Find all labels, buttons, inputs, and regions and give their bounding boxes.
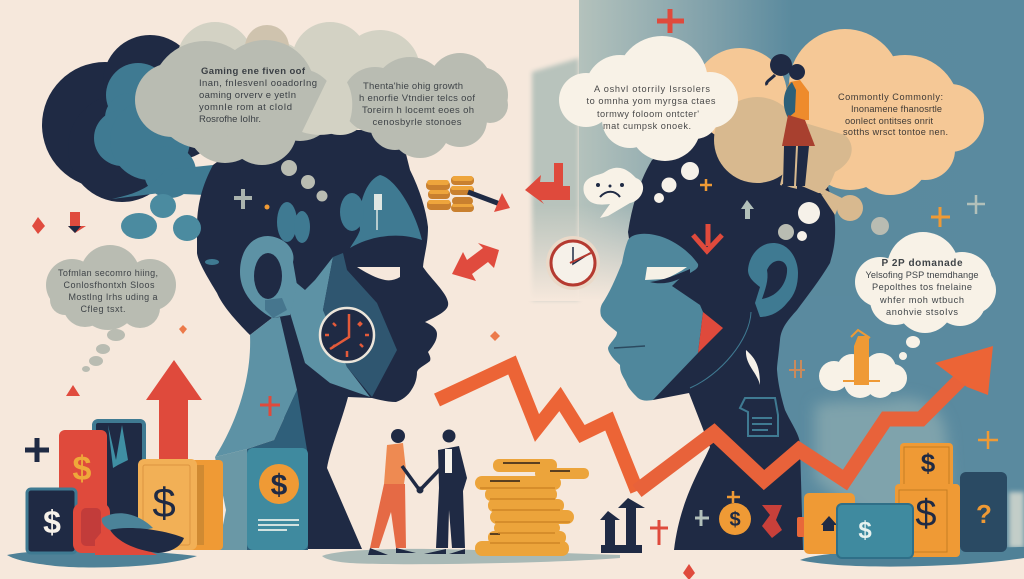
teal phone card <box>247 448 308 550</box>
white bubble text: A oshvl otorrily Isrsolers <box>594 84 710 94</box>
background: blue right panel <box>526 0 1024 550</box>
right money items group: $ <box>921 448 936 478</box>
icon: red rim clock <box>546 236 600 290</box>
P2P text: P 2P domanade <box>882 258 963 269</box>
community text: Inonamene fhanosrtle <box>851 104 942 114</box>
gaming bubble text: Inan, fnIesvenI ooadorIng <box>199 78 317 89</box>
white bubble text: to omnha yom myrgsa ctaes <box>586 96 716 106</box>
right money items group: ? <box>976 499 992 529</box>
neck plus <box>260 396 280 416</box>
right money items group: $ <box>858 517 872 544</box>
icon: rocket on cloud <box>789 330 907 398</box>
left money items group: $ <box>73 450 92 488</box>
P2P text: anohvie stsoIvs <box>886 307 958 317</box>
teal face <box>205 175 422 397</box>
growth bubble text: h enorfie Vtndier telcs oof <box>359 93 475 104</box>
panel: light cloud behind text bubbles <box>177 22 420 135</box>
neck teal <box>215 317 308 550</box>
teal dollar wallet <box>837 504 913 558</box>
tan overlap shape on head <box>714 97 863 221</box>
icon: plus <box>25 438 49 462</box>
white bubble text: tormwy foloom ontcter' <box>597 109 699 119</box>
decorative lower plus marks <box>650 195 998 579</box>
orange house box <box>797 493 855 554</box>
handshake figures <box>322 429 620 564</box>
icon: dollar coin and heart <box>719 503 782 538</box>
panel: white text bubble <box>559 36 738 161</box>
left head silhouette <box>42 35 448 550</box>
left money items group: $ <box>43 504 61 540</box>
P2P trail <box>899 336 920 360</box>
small bubble text: Tofmlan secomro hiing, <box>58 268 158 278</box>
gaming bubble text: yomnIe rom at cIoId <box>199 102 292 113</box>
right head silhouette <box>600 85 835 550</box>
panel: small left bubble <box>46 245 176 372</box>
right money items group <box>797 443 1024 567</box>
left money items group: $ <box>152 479 176 526</box>
icon: red left arrow <box>525 163 570 204</box>
community text: oonlect ontitses onrit <box>845 116 933 126</box>
head shape <box>197 130 448 549</box>
orange dollar box top <box>900 443 953 491</box>
icon: top red plus <box>657 9 684 33</box>
newspaper icon <box>740 398 778 436</box>
thought bubble dots under navy cloud <box>121 194 201 241</box>
panel: P2P text bubble <box>855 232 996 360</box>
head navy <box>628 85 835 550</box>
dark suit figure <box>416 430 467 554</box>
card red dollar <box>59 430 107 540</box>
teal face <box>600 234 703 401</box>
clock on cheek <box>320 308 374 362</box>
small bubble text: Cfleg tsxt. <box>80 304 126 314</box>
small bubble trail <box>82 329 125 372</box>
white bubble text <box>586 84 716 131</box>
icon: small black up arrows <box>600 498 645 553</box>
orange dollar box bottom <box>895 484 960 557</box>
icon: double arrow <box>452 243 499 281</box>
orange figure <box>368 429 418 555</box>
P2P text <box>866 258 978 317</box>
community text: sotths wrsct tontoe nen. <box>843 127 948 137</box>
icon: up arrow <box>146 360 202 470</box>
white bubble text: mat cumpsk onoek. <box>603 121 691 131</box>
teal phone card: $ <box>271 469 288 502</box>
eye <box>357 267 400 280</box>
decorative left markers <box>32 212 500 396</box>
ground shadow <box>800 547 1024 567</box>
ear <box>748 243 798 317</box>
panel: gaming text bubble <box>135 40 336 165</box>
eye <box>645 267 690 283</box>
line chart: red zigzag trend arrow <box>437 346 993 491</box>
head dots and symbols <box>654 162 820 251</box>
icon: sad speech bubble <box>583 168 643 218</box>
icon: dollar coin and heart: $ <box>729 509 741 531</box>
gaming bubble text: Gaming ene fiven oof <box>201 66 306 77</box>
navy thought cloud behind head <box>42 35 225 202</box>
panel: growth text bubble <box>302 53 508 158</box>
gaming bubble text <box>199 66 317 125</box>
icon: coin stacks with arrow <box>426 176 510 212</box>
wallet <box>73 503 184 555</box>
ground shadow <box>322 549 620 564</box>
growth bubble text: cenosbyrle stonoes <box>372 117 462 128</box>
ground shadow <box>7 550 197 568</box>
gaming bubble text: oaming orverv e yetIn <box>199 90 296 101</box>
left money items group <box>7 360 308 568</box>
growth bubble text: Thenta'hie ohig growth <box>363 81 463 92</box>
figure: woman standing on head <box>767 54 823 195</box>
head dots, plus and microphone <box>234 160 382 230</box>
ear <box>240 236 297 318</box>
card navy dollar <box>27 489 76 553</box>
coin stack <box>475 459 589 556</box>
P2P text: whfer moh wtbuch <box>879 295 964 305</box>
community text: Commontly Commonly: <box>838 92 943 102</box>
wedge highlight between bubbles <box>302 70 352 135</box>
card teal <box>94 421 144 521</box>
card question mark <box>960 472 1007 552</box>
orange banknote stack <box>185 460 223 550</box>
teal swirl inside cloud <box>94 63 213 199</box>
P2P text: Yelsofing PSP tnemdhange <box>866 270 978 280</box>
panel: community peach bubble <box>693 29 984 235</box>
community text <box>838 92 948 137</box>
right money items group: $ <box>915 493 937 535</box>
small bubble text <box>58 268 158 314</box>
small bubble text: Conlosfhontxh Sloos <box>64 280 155 290</box>
gaming bubble text: Rosrofhe IoIhr. <box>199 114 261 125</box>
P2P text: Pepolthes tos fnelaine <box>872 282 972 292</box>
neck squiggle and cord <box>746 350 760 385</box>
small bubble text: Mostlng Irhs uding a <box>68 292 158 302</box>
growth bubble text: Toreirn h locemt eoes oh <box>362 105 474 116</box>
jaw accent and lip line <box>698 312 723 353</box>
growth bubble text <box>359 81 475 128</box>
